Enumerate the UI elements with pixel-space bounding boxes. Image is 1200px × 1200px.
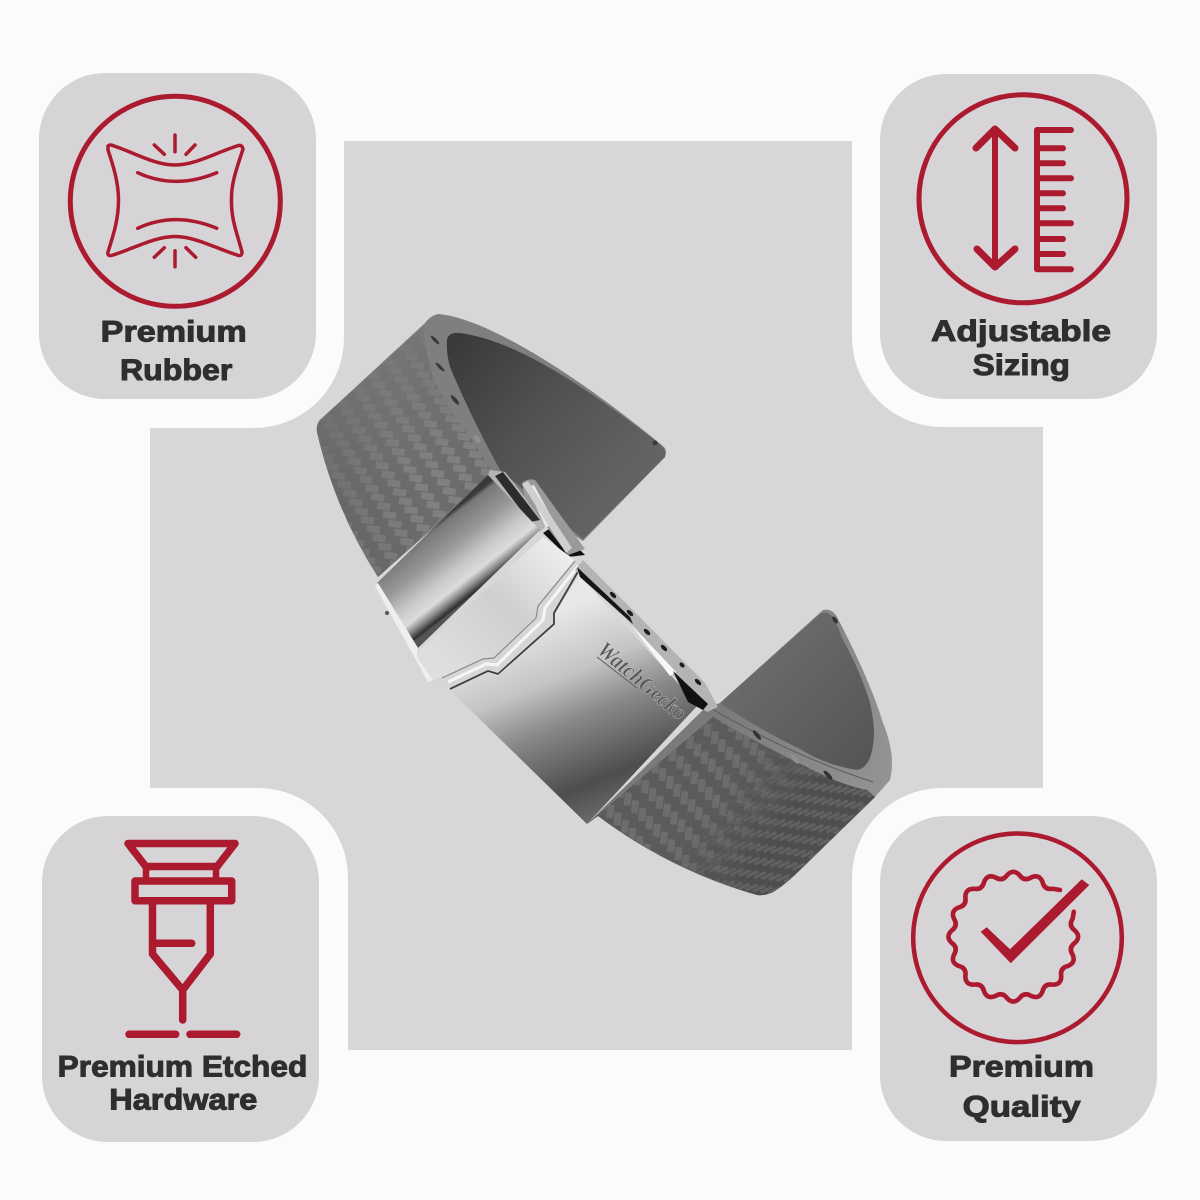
lower strap section bbox=[587, 610, 892, 895]
panel: premium rubber bbox=[39, 73, 316, 399]
clasp main etched plate bbox=[450, 575, 698, 824]
icon: quality seal with check mark bbox=[913, 834, 1122, 1042]
clasp middle plate bbox=[417, 537, 575, 680]
label: premium rubber bbox=[101, 316, 247, 387]
label: adjustable sizing: Adjustable bbox=[931, 315, 1111, 348]
label: premium rubber: Premium bbox=[101, 316, 247, 349]
panel: premium etched hardware bbox=[42, 816, 319, 1142]
label: premium rubber: Rubber bbox=[120, 354, 233, 387]
central grey backdrop bbox=[150, 141, 1043, 1050]
product: rubber watch strap with clasp bbox=[317, 314, 892, 895]
label: premium etched hardware bbox=[58, 1051, 307, 1116]
clasp folding cover bbox=[377, 475, 540, 648]
label: adjustable sizing bbox=[931, 315, 1111, 382]
label: premium etched hardware: Premium Etched bbox=[58, 1051, 307, 1084]
label: premium quality: Premium bbox=[949, 1051, 1094, 1084]
perforated clasp edge bbox=[575, 560, 718, 712]
clasp hinge bbox=[488, 470, 585, 557]
label: adjustable sizing: Sizing bbox=[973, 349, 1070, 382]
icon: stretching rubber bbox=[70, 96, 280, 306]
clasp hardware bbox=[375, 470, 718, 824]
clasp raised lip bbox=[433, 560, 583, 689]
upper strap section bbox=[317, 314, 666, 577]
panel: premium quality bbox=[880, 816, 1157, 1141]
panel: adjustable sizing bbox=[880, 74, 1157, 399]
etched logo: WatchGecko bbox=[593, 637, 692, 725]
label: premium etched hardware: Hardware bbox=[109, 1083, 257, 1116]
label: premium quality bbox=[949, 1051, 1094, 1124]
icon: laser etching head bbox=[128, 844, 237, 1034]
label: premium quality: Quality bbox=[963, 1091, 1081, 1124]
icon: adjustable arrow and scale bbox=[919, 95, 1127, 303]
